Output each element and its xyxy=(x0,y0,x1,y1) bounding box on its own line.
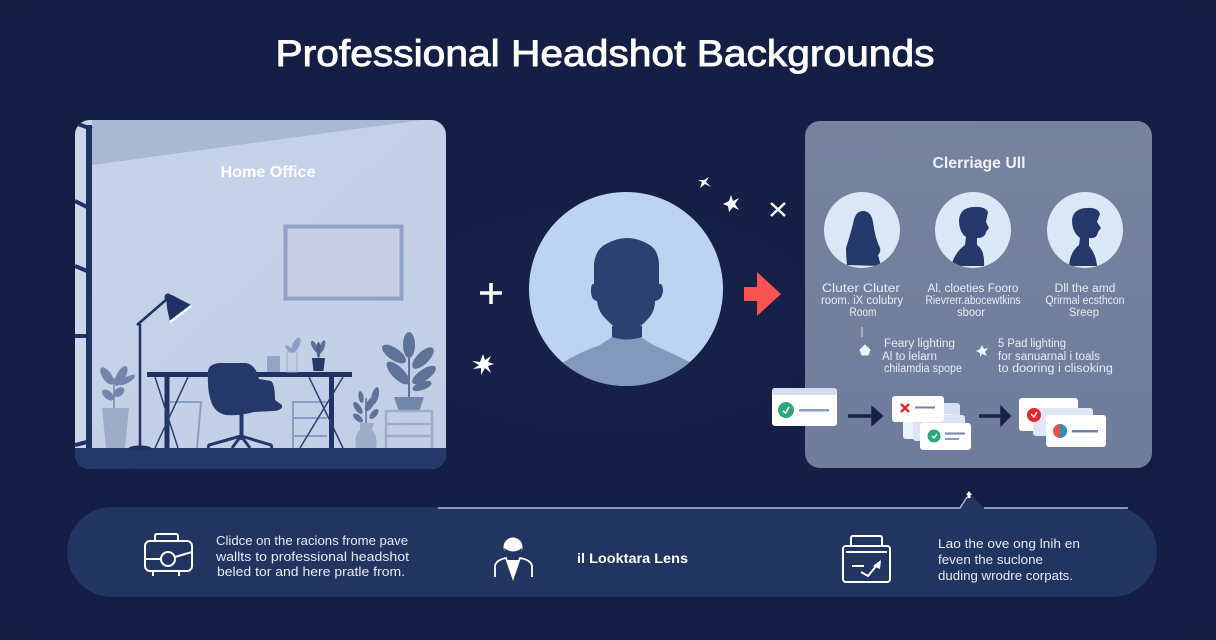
bar top rule with pointer xyxy=(438,491,1128,508)
text: right step: duding wrodre corpats. xyxy=(938,568,1073,583)
text: left step: wallts to professional headshot xyxy=(215,549,409,564)
avatar captions: Al. cloeties Fooro xyxy=(928,283,1018,295)
avatar three xyxy=(1047,192,1123,268)
lighting note two xyxy=(976,338,1113,375)
flow arrow two xyxy=(979,409,1009,423)
avatar captions xyxy=(821,283,1124,319)
desk xyxy=(147,372,352,448)
flow card stack: mixed xyxy=(892,396,971,450)
sparkles near arrow xyxy=(698,177,785,216)
flow arrow one xyxy=(848,409,881,423)
decorative mark: left star xyxy=(472,354,494,375)
avatar captions: Room xyxy=(850,307,876,319)
avatar captions: Dll the amd xyxy=(1054,283,1116,295)
portrait head xyxy=(591,238,663,340)
small floor plant xyxy=(351,386,381,448)
text: center step: il Looktara Lens xyxy=(577,550,688,566)
office chair xyxy=(208,363,282,448)
icon: person xyxy=(495,538,532,580)
text: right step xyxy=(938,536,1080,583)
avatar two xyxy=(935,192,1011,268)
left floor plant xyxy=(98,364,136,448)
text: right step: feven the suclone xyxy=(938,552,1043,567)
avatar captions: Cluter Cluter xyxy=(822,283,900,295)
bottom info bar xyxy=(67,491,1157,597)
panel heading: Clerriage Ull xyxy=(932,155,1026,172)
panel: home office xyxy=(75,120,446,469)
text: right step: Lao the ove ong lnih en xyxy=(938,536,1080,551)
lighting note one: Feary lighting xyxy=(884,338,955,350)
floor lamp xyxy=(129,294,191,450)
icon: clipboard case xyxy=(843,536,890,582)
avatar captions: room. iX colubry xyxy=(821,295,903,307)
avatar one xyxy=(824,192,900,268)
lighting note two: 5 Pad lighting xyxy=(998,338,1066,350)
portrait shoulders xyxy=(562,337,690,386)
wall picture frame xyxy=(286,226,402,298)
avatar captions: Sreep xyxy=(1069,307,1099,319)
lighting note two: to dooring i clisoking xyxy=(998,363,1113,375)
central portrait xyxy=(529,192,723,400)
flow card: approved xyxy=(772,388,837,426)
avatar captions: sboor xyxy=(957,307,985,319)
flow card stack: final xyxy=(1019,398,1106,447)
potted plant on stand xyxy=(379,332,439,448)
lighting note one: chilamdia spope xyxy=(884,363,962,375)
panel: results xyxy=(805,121,1152,468)
lighting note one: Al to lelarn xyxy=(882,351,937,363)
decorative mark: plus xyxy=(480,283,502,304)
title: Professional Headshot Backgrounds xyxy=(276,33,934,74)
avatar captions: Qrirmal ecsthcon xyxy=(1046,295,1124,307)
avatar captions: Rievrerr.abocewtkins xyxy=(926,295,1021,307)
red arrow xyxy=(744,272,781,316)
lighting note one xyxy=(860,327,962,375)
label: home office: Home Office xyxy=(220,164,316,181)
desk items xyxy=(267,336,327,372)
lighting note two: for sanuarnal i toals xyxy=(998,351,1100,363)
text: left step: Clidce on the racions frome pave xyxy=(216,533,408,548)
shelf units behind desk xyxy=(170,402,327,448)
icon: camera bag xyxy=(145,534,192,576)
text: left step: beled tor and here pratle from. xyxy=(217,564,405,579)
text: left step xyxy=(215,533,409,579)
